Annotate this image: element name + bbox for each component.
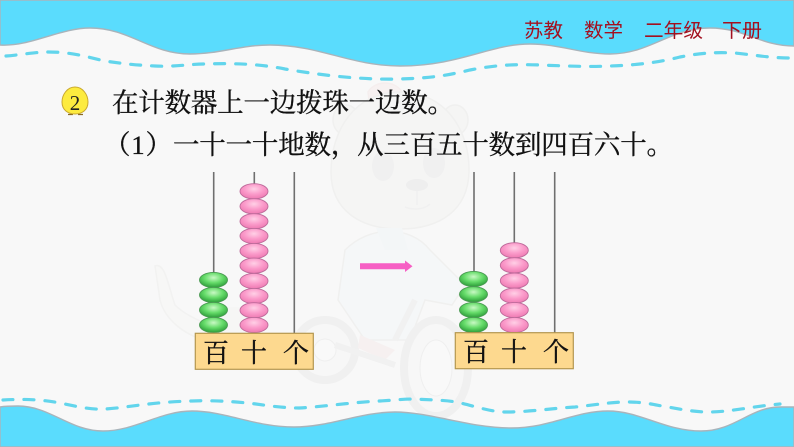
place value base: 十 [501,338,527,367]
question line 2: 一十一十地数，从三百五十数到四百六十。 [173,130,673,160]
rods [474,172,555,334]
hundreds beads [460,271,488,333]
abacus: before, 350 [195,172,313,369]
hundreds beads [200,272,228,333]
place value base [455,333,573,369]
abacus: after, 360 [455,172,573,369]
bottom dashed wave line [3,399,780,412]
place value base [195,333,313,369]
place value base: 百 [203,339,229,368]
top dashed wave line [6,52,790,79]
place value base: 个 [543,338,569,367]
header label [524,20,762,42]
place value base: 十 [241,339,267,368]
icon: chick number badge 2 [62,87,88,115]
header label: 苏教 [524,20,563,42]
rods [214,172,294,334]
place value base: 百 [463,338,489,367]
top wave band [0,0,794,66]
place value base: 个 [283,339,309,368]
tens beads [240,184,268,333]
header label: 下册 [722,20,762,42]
question line 1: 在计数器上一边拨珠一边数。 [112,88,454,118]
bottom wave band [0,406,794,447]
header label: 数学 [584,20,623,42]
tens beads [500,243,528,333]
icon: chick number badge 2: 2 [70,91,80,115]
watermark: bear riding a bicycle [155,83,469,416]
arrow [360,260,412,272]
question line 2: （1） [104,130,172,160]
header label: 二年级 [644,20,703,42]
